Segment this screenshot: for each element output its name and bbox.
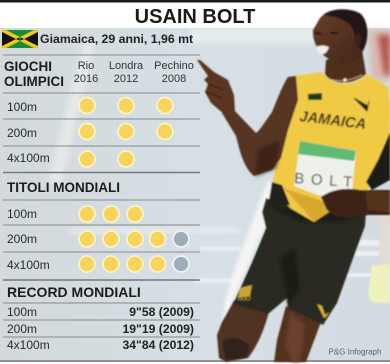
left leg: [217, 300, 269, 362]
row labels: 4x100m: [7, 151, 50, 165]
panel: Giochi Olimpici: [4, 59, 194, 167]
row labels: 100m: [7, 100, 37, 114]
bib name: BOLT: [294, 170, 353, 191]
heading: Giochi Olimpici: OLIMPICI: [4, 74, 64, 89]
jersey: [270, 72, 390, 222]
bib: [294, 141, 356, 196]
row labels: [7, 100, 50, 165]
shorts logo: puma: [317, 304, 329, 318]
row labels: 4x100m: [7, 258, 50, 272]
row labels: [7, 207, 50, 272]
column headers: 2012: [114, 73, 138, 85]
record labels: [7, 305, 50, 352]
mouth: [316, 46, 329, 54]
title: USAIN BOLT: [135, 6, 255, 28]
pointing hand: [197, 60, 235, 114]
heading: Record Mondiali: RECORD MONDIALI: [7, 284, 141, 300]
jersey flag: [308, 93, 322, 100]
icon: Jamaican flag: [2, 30, 38, 48]
athlete figure: [197, 9, 390, 362]
necklace: [327, 75, 362, 81]
right leg: [274, 306, 321, 362]
column headers: Rio: [78, 60, 94, 72]
column headers: Londra: [109, 60, 144, 72]
record values: 34"84 (2012): [122, 338, 194, 352]
heading: Titoli Mondiali: TITOLI MONDIALI: [7, 180, 120, 195]
white halo: [222, 180, 282, 322]
eyes: [315, 33, 338, 34]
hair: [323, 9, 367, 50]
credit: P&G Infograph: [328, 348, 381, 356]
divider lines: [3, 55, 200, 337]
jersey puma: [354, 98, 369, 111]
top rule: [0, 0, 390, 2]
column headers: 2016: [74, 73, 98, 85]
record values: [122, 305, 194, 352]
column headers: Pechino: [154, 60, 194, 72]
silver medals: [173, 231, 189, 272]
column headers: [74, 60, 194, 85]
shorts logo: flag and rings: [238, 285, 252, 298]
shorts: [233, 198, 366, 325]
gold medals: [79, 206, 166, 272]
row labels: 100m: [7, 207, 37, 221]
heading: Giochi Olimpici: GIOCHI: [4, 59, 52, 74]
gold medals: [79, 98, 173, 167]
bottom rule: [0, 360, 390, 362]
pointing arm: [222, 76, 298, 176]
other hand and forearm: [321, 189, 390, 218]
thick dividers: [3, 172, 200, 280]
row labels: 200m: [7, 126, 37, 140]
panel: Titoli Mondiali: [7, 180, 189, 272]
ear: [354, 33, 362, 47]
record labels: 200m: [7, 322, 37, 336]
athlete details: Giamaica, 29 anni, 1,96 mt: [40, 32, 193, 46]
row labels: 200m: [7, 232, 37, 246]
jersey shading: [366, 132, 390, 190]
jersey text: JAMAICA: [299, 108, 367, 133]
head: [313, 10, 367, 64]
record labels: 4x100m: [7, 338, 50, 352]
neck: [325, 50, 366, 83]
column headers: 2008: [162, 73, 186, 85]
record values: 19"19 (2009): [122, 322, 194, 336]
record values: 9"58 (2009): [129, 305, 194, 319]
record labels: 100m: [7, 305, 37, 319]
panel: Record Mondiali: [7, 284, 194, 352]
